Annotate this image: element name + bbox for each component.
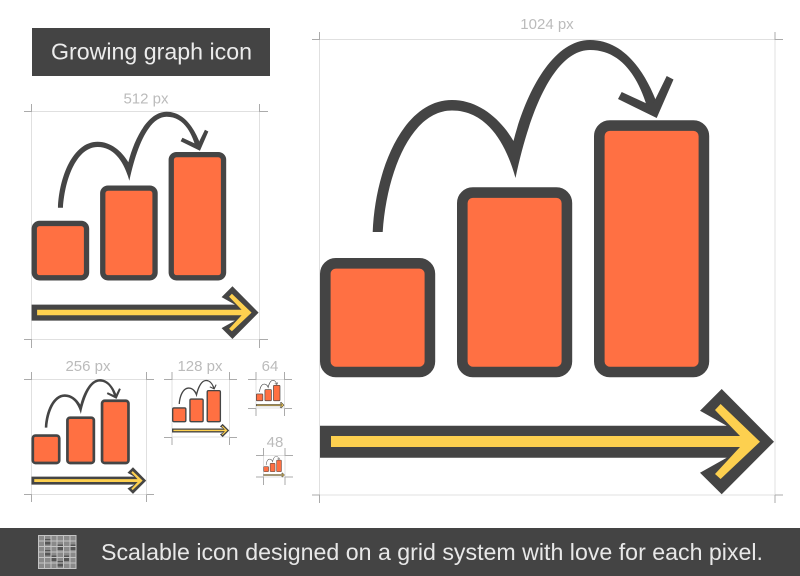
panel: 256 px icon: 256 px <box>65 358 111 375</box>
panel: 256 px icon <box>24 358 154 502</box>
panel: 128 px icon: 128 px <box>177 358 223 375</box>
panel: 64 px icon: 64 <box>262 358 278 375</box>
footer bar <box>0 528 800 576</box>
icon: pixel grid <box>38 535 76 569</box>
panel: 64 px icon <box>248 358 292 416</box>
panel: 1024 px icon: 1024 px <box>520 16 574 33</box>
panel: 128 px icon <box>164 358 237 445</box>
panel: 512 px icon <box>24 90 268 348</box>
panel: 48 px icon <box>256 434 293 485</box>
footer tagline: Scalable icon designed on a grid system with love for each pixel. <box>101 539 763 565</box>
panel: 48 px icon: 48 <box>267 434 283 451</box>
title banner <box>32 28 270 76</box>
panel: 512 px icon: 512 px <box>123 90 169 108</box>
title banner: Growing graph icon <box>51 38 252 64</box>
